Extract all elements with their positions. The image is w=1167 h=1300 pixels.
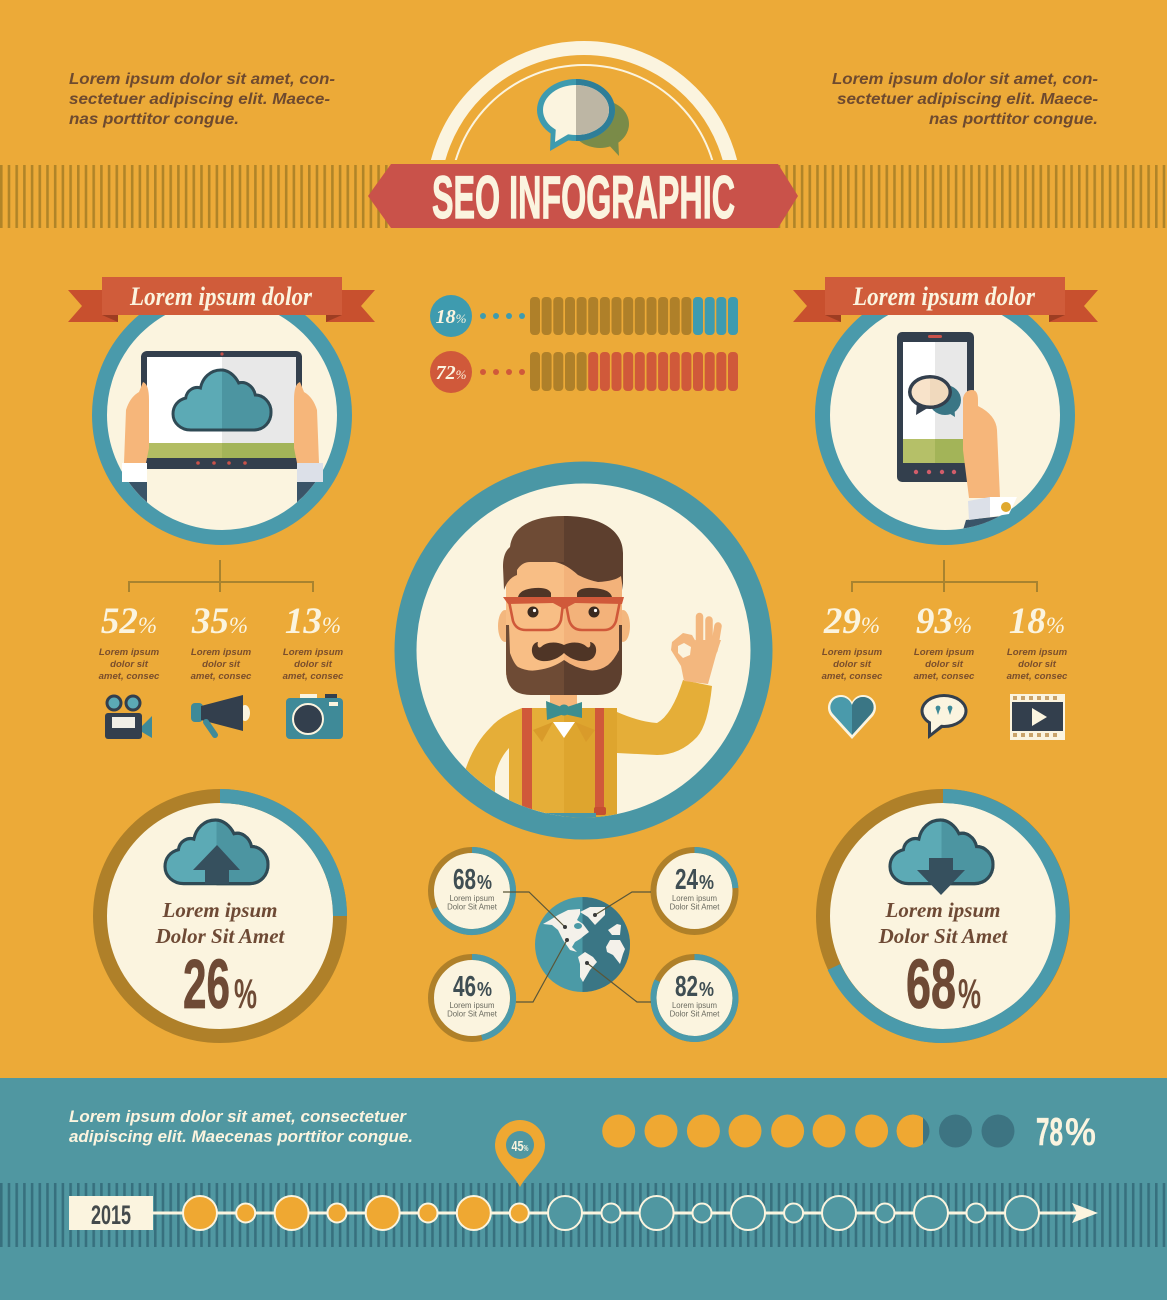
small ring: 82 percent: Lorem ipsum: [672, 1001, 717, 1010]
title banner: SEO INFOGRAPHIC: [432, 164, 735, 231]
stat: 35 percent: 35%: [191, 601, 248, 642]
icon: tablet held in hands: [122, 351, 323, 510]
stat: 13 percent: Lorem ipsum: [283, 647, 344, 658]
text block: top right intro: nas porttitor congue.: [929, 111, 1098, 128]
dot progress: 78 percent: 78: [1036, 1111, 1063, 1154]
small ring: 68 percent: %: [477, 872, 492, 894]
ring chart: 26 percent: Dolor Sit Amet: [155, 924, 286, 948]
icon: hand holding the phone: [963, 390, 1017, 528]
small ring: 68 percent: 68: [453, 864, 476, 896]
stat: 18 percent: 18%: [1009, 601, 1065, 642]
text block: top left intro: Lorem ipsum dolor sit amet, con-: [69, 71, 335, 88]
stat: 52 percent: 52%: [101, 601, 157, 642]
small ring: 46 percent: %: [477, 979, 492, 1001]
map pin: 45 percent: 45%: [512, 1138, 528, 1155]
illustration: bearded man with glasses: [460, 680, 712, 820]
text block: bottom intro: [69, 1108, 413, 1146]
map pin: 45 percent: [495, 1120, 545, 1187]
ribbon: left heading: [68, 277, 375, 322]
bar chart: 18 percent: [430, 295, 738, 337]
ribbon: right heading: Lorem ipsum dolor: [852, 282, 1036, 311]
icon: megaphone: [191, 695, 250, 735]
bar chart: 72 percent: 72%: [436, 362, 467, 384]
small ring: 46 percent: Dolor Sit Amet: [447, 1010, 498, 1018]
ring chart: 26 percent: Lorem ipsum: [162, 898, 277, 922]
dot progress: 78 percent: %: [1065, 1111, 1096, 1154]
icon: globe: [535, 895, 632, 995]
stat: 93 percent: 93%: [916, 601, 972, 642]
connector: right stats tree: [852, 560, 1037, 592]
neck: [550, 695, 577, 706]
stat: 35 percent: amet, consec: [191, 671, 252, 682]
face: [506, 555, 622, 675]
icon: video camera: [105, 694, 152, 739]
eyes: [528, 606, 600, 618]
stat: 29 percent: [822, 601, 883, 682]
icon: speech bubbles: [537, 79, 629, 156]
stat: 18 percent: amet, consec: [1007, 671, 1068, 682]
stat: 52 percent: Lorem ipsum: [99, 647, 160, 658]
timeline nodes filled: [183, 1196, 529, 1230]
header stripes: [0, 165, 1167, 228]
title banner: [368, 164, 798, 231]
small ring: 82 percent: [653, 957, 736, 1039]
ring chart: 26 percent: %: [234, 970, 257, 1017]
year label: [69, 1196, 153, 1230]
glasses: [503, 597, 624, 630]
stat: 35 percent: Lorem ipsum: [191, 647, 252, 658]
stat: 18 percent: Lorem ipsum: [1007, 647, 1068, 658]
small ring: 68 percent: Lorem ipsum: [449, 894, 495, 903]
hair: [503, 516, 623, 590]
bow tie: [546, 701, 582, 720]
text block: top right intro: sectetuer adipiscing elit. Maece-: [837, 91, 1098, 108]
small ring: 46 percent: 46: [453, 971, 476, 1003]
small ring: 46 percent: [431, 957, 513, 1039]
small ring: 24 percent: Lorem ipsum: [672, 894, 717, 903]
icon: cloud download: [890, 820, 993, 895]
icon: cloud on screen: [173, 370, 271, 430]
ring chart: 68 percent: [823, 796, 1063, 1036]
beard: [506, 625, 622, 695]
small ring: 82 percent: %: [699, 979, 714, 1001]
ring chart: 68 percent: Dolor Sit Amet: [878, 924, 1009, 948]
timeline: [69, 1196, 1098, 1230]
stat: 93 percent: dolor sit: [925, 659, 964, 670]
small ring: 68 percent: Dolor Sit Amet: [447, 902, 498, 912]
connectors: small rings to globe: [503, 892, 651, 1002]
bar chart: 18 percent: 18%: [436, 306, 467, 328]
bar chart: 72 percent: [430, 351, 738, 393]
text block: top right intro: [832, 71, 1098, 128]
ribbon: left heading: Lorem ipsum dolor: [129, 282, 313, 311]
panel: bottom band: [0, 1078, 1167, 1300]
small ring: 24 percent: [654, 850, 736, 932]
ears: [498, 610, 630, 642]
stat: 13 percent: [283, 601, 344, 682]
icon: smartphone with chat bubbles: [897, 332, 974, 482]
hand making ok sign: [671, 616, 721, 684]
text block: top left intro: nas porttitor congue.: [69, 111, 239, 128]
ring chart: 68 percent: %: [958, 970, 981, 1017]
stat: 13 percent: dolor sit: [294, 659, 333, 670]
icon: photo camera: [286, 694, 343, 739]
small ring: 46 percent: Lorem ipsum: [449, 1001, 495, 1010]
text block: bottom intro: Lorem ipsum dolor sit amet, consectetuer: [69, 1108, 408, 1126]
timeline stripes: [0, 1183, 1167, 1247]
stat: 18 percent: [1007, 601, 1068, 682]
dot progress: 78 percent: [602, 1114, 1096, 1148]
stat: 29 percent: Lorem ipsum: [822, 647, 883, 658]
stat: 35 percent: dolor sit: [202, 659, 241, 670]
arch above the title: [430, 41, 738, 160]
stat: 18 percent: dolor sit: [1018, 659, 1057, 670]
stat: 35 percent: [191, 601, 252, 682]
timeline nodes open: [548, 1196, 1039, 1230]
panel: central character medallion: [406, 472, 762, 828]
stat: 93 percent: amet, consec: [914, 671, 975, 682]
text block: top right intro: Lorem ipsum dolor sit amet, con-: [832, 71, 1098, 88]
ring chart: 26 percent: 26: [183, 945, 230, 1023]
connector: left stats tree: [129, 560, 313, 592]
ring chart: 26 percent: [100, 796, 340, 1036]
panel: left tablet medallion: [100, 292, 344, 538]
stat: 29 percent: amet, consec: [822, 671, 883, 682]
ring chart: 68 percent: 68: [906, 945, 956, 1023]
text block: top left intro: sectetuer adipiscing elit. Maece-: [69, 91, 330, 108]
stat: 52 percent: amet, consec: [99, 671, 160, 682]
stat: 13 percent: 13%: [285, 601, 341, 642]
moustache: [532, 642, 596, 661]
year label: 2015: [91, 1200, 131, 1230]
small ring: 24 percent: 24: [675, 864, 698, 896]
stat: 52 percent: [99, 601, 160, 682]
small ring: 68 percent: [431, 850, 513, 932]
icon: quote bubble: [920, 694, 968, 739]
small ring: 82 percent: Dolor Sit Amet: [670, 1010, 720, 1018]
stat: 29 percent: 29%: [823, 601, 880, 642]
stat: 29 percent: dolor sit: [833, 659, 872, 670]
text block: bottom intro: adipiscing elit. Maecenas porttitor congue.: [69, 1128, 413, 1146]
stat: 13 percent: amet, consec: [283, 671, 344, 682]
body and sweater: [460, 680, 712, 820]
panel: right phone medallion: [822, 292, 1068, 545]
stat: 93 percent: [914, 601, 975, 682]
icon: film strip: [1010, 694, 1065, 740]
text block: top left intro: [69, 71, 335, 128]
icon: cloud upload: [165, 820, 268, 884]
icon: heart: [828, 695, 876, 739]
eyebrows: [518, 588, 612, 597]
small ring: 82 percent: 82: [675, 971, 698, 1003]
small ring: 24 percent: Dolor Sit Amet: [670, 902, 720, 912]
stat: 93 percent: Lorem ipsum: [914, 647, 975, 658]
ring chart: 68 percent: Lorem ipsum: [885, 898, 1000, 922]
stat: 52 percent: dolor sit: [110, 659, 149, 670]
ribbon: right heading: [793, 277, 1098, 322]
small ring: 24 percent: %: [699, 872, 714, 894]
